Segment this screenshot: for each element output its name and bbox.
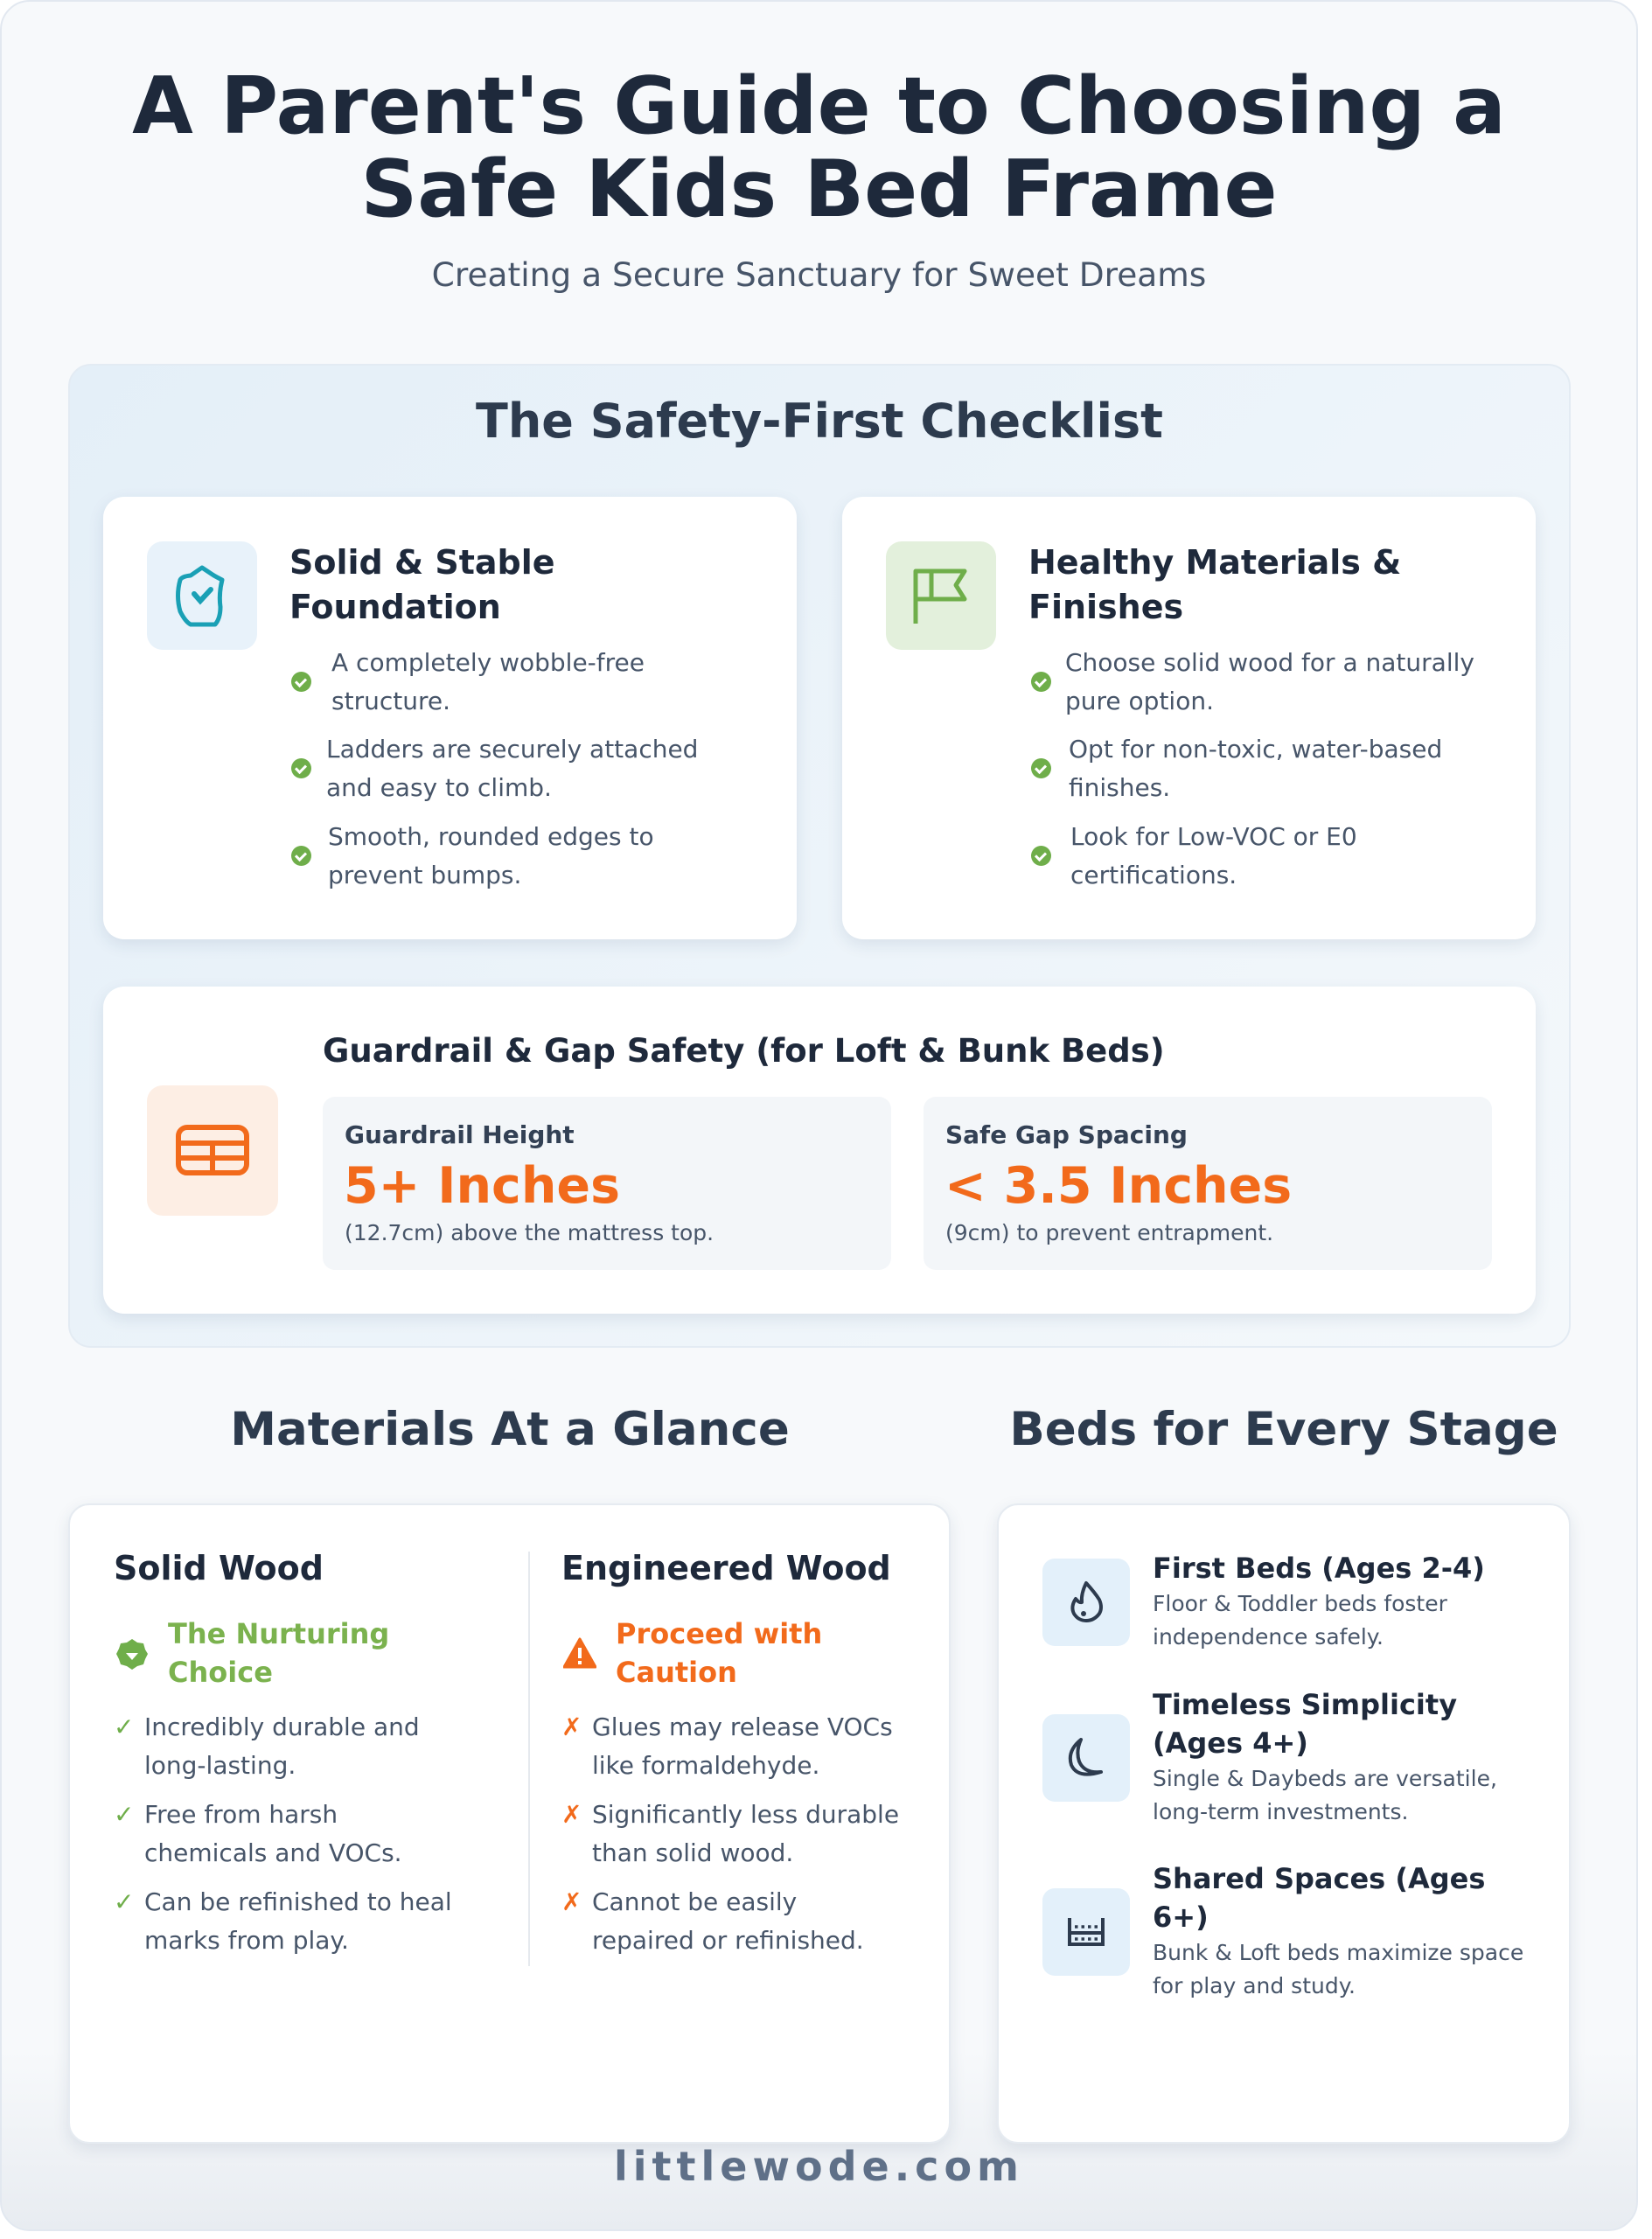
badge: caution: Proceed with bbox=[616, 1617, 822, 1650]
item: first beds bbox=[1042, 1552, 1485, 1650]
stat: gap spacing: Safe Gap Spacing bbox=[945, 1120, 1188, 1149]
item: shared spaces: 6+) bbox=[1153, 1901, 1209, 1934]
card: solid & stable foundation bbox=[103, 497, 797, 939]
panel: safety checklist bbox=[68, 364, 1571, 1348]
stat: guardrail height: (12.7cm) above the mattress top. bbox=[345, 1220, 714, 1245]
item: timeless simplicity bbox=[1042, 1688, 1497, 1824]
bullet list bbox=[1031, 648, 1474, 889]
cons list: Glues may release VOCs bbox=[592, 1712, 893, 1741]
cons list: than solid wood. bbox=[592, 1838, 793, 1867]
stat: gap spacing bbox=[924, 1097, 1492, 1270]
bullet list: pure option. bbox=[1065, 687, 1214, 715]
item: shared spaces: Shared Spaces (Ages bbox=[1153, 1862, 1485, 1895]
bullet list: finishes. bbox=[1069, 773, 1170, 802]
column: engineered wood: Engineered Wood bbox=[561, 1549, 891, 1587]
icon: bunk bed bbox=[1042, 1888, 1130, 1976]
icon: guardrail bbox=[147, 1085, 278, 1216]
panel: materials comparison bbox=[68, 1503, 951, 2144]
cons list: like formaldehyde. bbox=[592, 1751, 819, 1780]
item: timeless simplicity: Timeless Simplicity bbox=[1153, 1688, 1457, 1721]
item: timeless simplicity: Single & Daybeds are versatile, bbox=[1153, 1766, 1497, 1791]
column: solid wood: Solid Wood bbox=[114, 1549, 324, 1587]
pros list: ✓ bbox=[114, 1887, 134, 1916]
bullet list: certifications. bbox=[1070, 861, 1237, 889]
pros list bbox=[114, 1712, 452, 1955]
item: shared spaces: Bunk & Loft beds maximize space bbox=[1153, 1940, 1523, 1965]
pros list: Free from harsh bbox=[144, 1800, 338, 1829]
title: Safe Kids Bed Frame bbox=[360, 143, 1278, 235]
cons list: Cannot be easily bbox=[592, 1887, 797, 1916]
pros list: ✓ bbox=[114, 1800, 134, 1829]
badge: nurturing choice: The Nurturing bbox=[168, 1617, 389, 1650]
title: A Parent's Guide to Choosing a bbox=[132, 60, 1506, 152]
pros list: long-lasting. bbox=[144, 1751, 296, 1780]
card heading bbox=[1028, 543, 1401, 626]
item: shared spaces: for play and study. bbox=[1153, 1973, 1356, 1998]
bullet list: prevent bumps. bbox=[328, 861, 521, 889]
bullet list: Smooth, rounded edges to bbox=[328, 822, 654, 851]
stat: gap spacing: < 3.5 Inches bbox=[944, 1157, 1292, 1215]
card heading: Finishes bbox=[1028, 588, 1183, 626]
icon: shield bbox=[147, 541, 257, 650]
card: guardrail & gap safety bbox=[103, 987, 1536, 1314]
heading: Guardrail & Gap Safety (for Loft & Bunk Beds) bbox=[323, 1032, 1165, 1070]
bullet list: and easy to climb. bbox=[326, 773, 552, 802]
stat: guardrail height: Guardrail Height bbox=[345, 1120, 575, 1149]
badge: caution: Caution bbox=[616, 1656, 737, 1689]
badge: caution bbox=[563, 1617, 822, 1689]
card heading bbox=[289, 543, 554, 626]
item: first beds: First Beds (Ages 2-4) bbox=[1153, 1552, 1485, 1585]
card: healthy materials bbox=[842, 497, 1536, 939]
footer: website: littlewode.com bbox=[614, 2143, 1024, 2190]
bullet list: Choose solid wood for a naturally bbox=[1065, 648, 1474, 677]
icon: flame bbox=[1042, 1559, 1130, 1646]
pros list: chemicals and VOCs. bbox=[144, 1838, 402, 1867]
heading: beds: Beds for Every Stage bbox=[1009, 1403, 1558, 1456]
card heading: Solid & Stable bbox=[289, 543, 554, 582]
pros list: Incredibly durable and bbox=[144, 1712, 420, 1741]
stat: guardrail height: 5+ Inches bbox=[344, 1157, 620, 1215]
bullet list bbox=[291, 648, 698, 889]
column: solid wood bbox=[114, 1549, 452, 1955]
bullet list: structure. bbox=[331, 687, 450, 715]
pros list: ✓ bbox=[114, 1712, 134, 1741]
badge: nurturing choice: Choice bbox=[168, 1656, 273, 1689]
panel: beds for every stage bbox=[997, 1503, 1571, 2144]
item: first beds: Floor & Toddler beds foster bbox=[1153, 1591, 1447, 1616]
heading: materials: Materials At a Glance bbox=[230, 1403, 790, 1456]
stat: gap spacing: (9cm) to prevent entrapment. bbox=[945, 1220, 1273, 1245]
item: shared spaces bbox=[1042, 1862, 1523, 1998]
item: timeless simplicity: (Ages 4+) bbox=[1153, 1726, 1308, 1760]
subtitle: Creating a Secure Sanctuary for Sweet Dreams bbox=[432, 255, 1206, 294]
cons list: Significantly less durable bbox=[592, 1800, 899, 1829]
bullet list: Look for Low-VOC or E0 bbox=[1070, 822, 1357, 851]
cons list: ✗ bbox=[561, 1887, 582, 1916]
cons list: repaired or refinished. bbox=[592, 1926, 864, 1955]
icon: flag bbox=[886, 541, 996, 650]
stat: guardrail height bbox=[323, 1097, 891, 1270]
pros list: Can be refinished to heal bbox=[144, 1887, 452, 1916]
title bbox=[132, 60, 1506, 235]
heading: checklist: The Safety-First Checklist bbox=[476, 394, 1163, 449]
bullet list: A completely wobble-free bbox=[331, 648, 645, 677]
column: engineered wood bbox=[561, 1549, 899, 1955]
bullet list: Opt for non-toxic, water-based bbox=[1069, 735, 1442, 764]
badge: nurturing choice bbox=[116, 1617, 389, 1689]
cons list: ✗ bbox=[561, 1712, 582, 1741]
bullet list: Ladders are securely attached bbox=[326, 735, 698, 764]
card heading: Healthy Materials & bbox=[1028, 543, 1401, 582]
cons list bbox=[561, 1712, 899, 1955]
card heading: Foundation bbox=[289, 588, 501, 626]
item: first beds: independence safely. bbox=[1153, 1624, 1384, 1650]
icon: moon bbox=[1042, 1714, 1130, 1802]
pros list: marks from play. bbox=[144, 1926, 349, 1955]
item: timeless simplicity: long-term investments. bbox=[1153, 1799, 1408, 1824]
cons list: ✗ bbox=[561, 1800, 582, 1829]
